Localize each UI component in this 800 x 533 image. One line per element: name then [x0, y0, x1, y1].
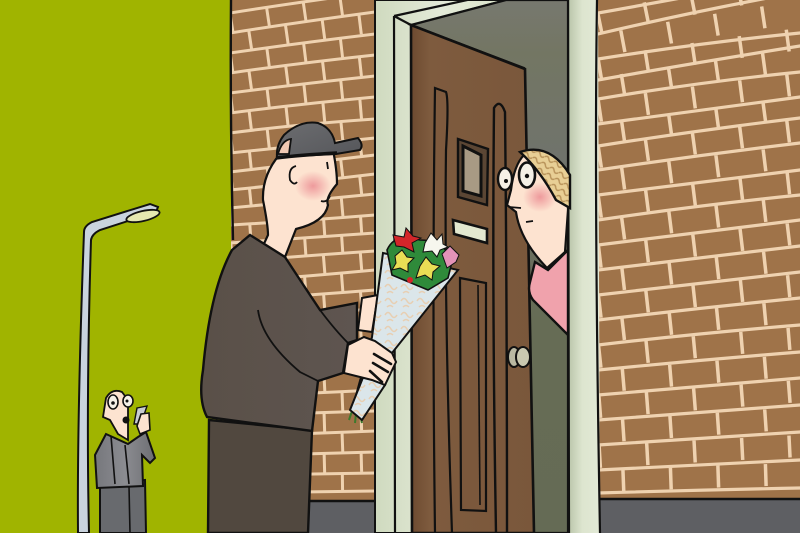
phone [134, 406, 147, 424]
red accent [407, 277, 413, 283]
woman hair [520, 150, 570, 208]
woman mouth and nose [509, 207, 533, 222]
plinth and wall edge outlines [231, 0, 800, 501]
door frame: left and lintel [375, 0, 506, 533]
bouquet [349, 228, 459, 423]
bouquet paper [352, 253, 458, 410]
door window [458, 139, 488, 205]
woman head [507, 152, 568, 268]
fingers [370, 354, 391, 382]
brick wall: left [230, 0, 375, 501]
lamp pole [78, 204, 158, 533]
street lamp [78, 204, 161, 533]
man trousers [208, 420, 312, 533]
bouquet back hand [358, 295, 378, 332]
door [411, 25, 534, 533]
woman at door [498, 150, 570, 335]
small man with phone [95, 391, 155, 533]
door frame detail lines [394, 0, 600, 533]
woman eyes [498, 162, 535, 190]
letterbox [453, 220, 487, 243]
red flower [393, 228, 421, 252]
lower door panel [460, 278, 486, 511]
bouquet greenery [387, 238, 452, 290]
small man eyes [108, 395, 133, 409]
man with bouquet [201, 122, 378, 533]
brick wall: right [598, 0, 800, 499]
door frame: right [568, 0, 600, 533]
man jacket [201, 235, 357, 431]
pink flower [442, 246, 459, 268]
yellow flowers [392, 250, 440, 280]
bouquet stems [349, 411, 362, 423]
door knob [508, 347, 530, 367]
man cap [276, 122, 362, 158]
bouquet lower wrap [350, 375, 385, 420]
white flower [423, 233, 448, 257]
small man head [103, 391, 128, 440]
man blush [295, 171, 331, 201]
small man trousers [100, 480, 146, 533]
jacket seams [111, 436, 130, 533]
door leaf [411, 25, 534, 533]
door right stile [493, 104, 507, 533]
lamp head [125, 207, 161, 225]
small man mouth [122, 416, 130, 424]
hallway interior [411, 0, 568, 533]
plinth: left wall base [300, 502, 375, 533]
jacket seam [258, 310, 348, 381]
small man jacket [95, 432, 155, 488]
man ear, eye, smile [290, 162, 330, 201]
man neck and head [262, 150, 337, 257]
small man hand [137, 413, 150, 434]
door left stile [434, 88, 452, 533]
plinth: right wall base [600, 500, 800, 533]
woman top [529, 250, 568, 335]
woman blush [523, 182, 557, 212]
man front hand [344, 337, 396, 385]
